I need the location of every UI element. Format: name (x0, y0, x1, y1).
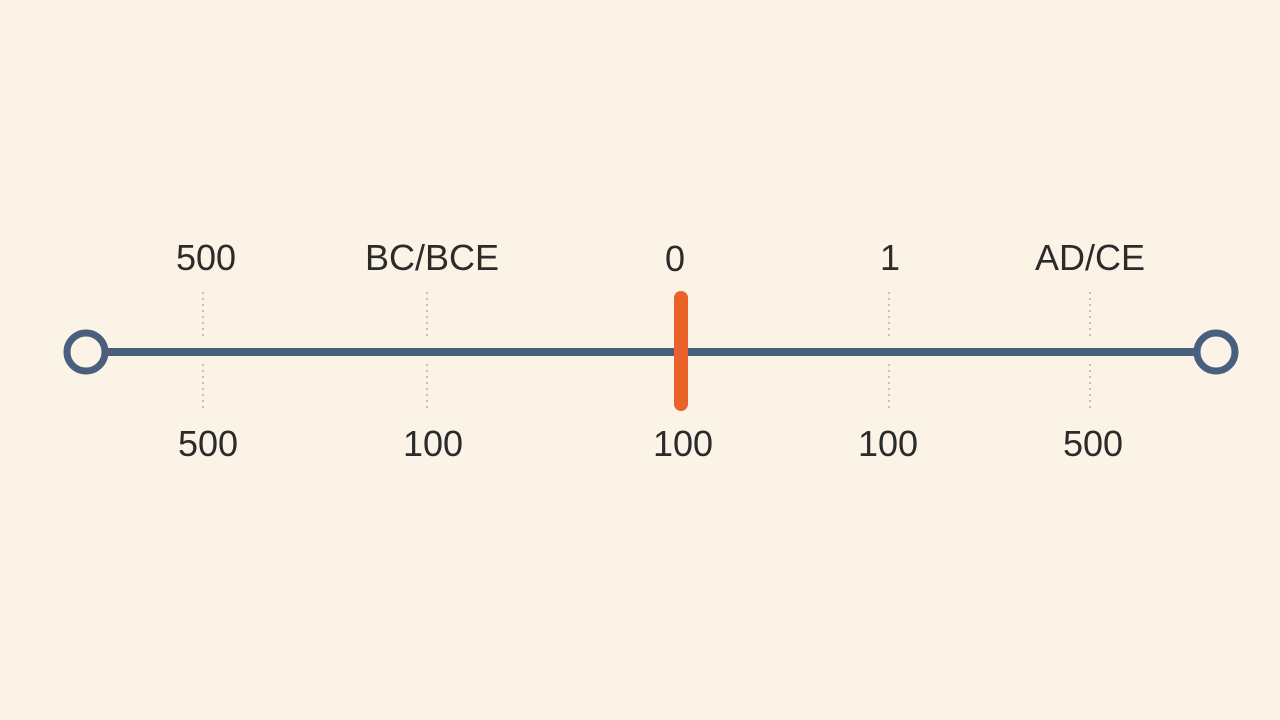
right endpoint circle (1197, 333, 1235, 371)
bottom labels: 100 (403, 423, 463, 464)
bottom labels: 100 (858, 423, 918, 464)
orange zero marker (674, 298, 688, 404)
top labels: 0 (665, 238, 685, 279)
top labels (176, 237, 1145, 279)
top labels: 1 (880, 237, 900, 278)
timeline axis line (104, 348, 1198, 356)
left endpoint circle (67, 333, 105, 371)
bottom labels (178, 423, 1123, 464)
top labels: AD/CE (1035, 237, 1145, 278)
bottom labels: 100 (653, 423, 713, 464)
top labels: 500 (176, 237, 236, 278)
bottom labels: 500 (1063, 423, 1123, 464)
top labels: BC/BCE (365, 237, 499, 278)
bottom labels: 500 (178, 423, 238, 464)
